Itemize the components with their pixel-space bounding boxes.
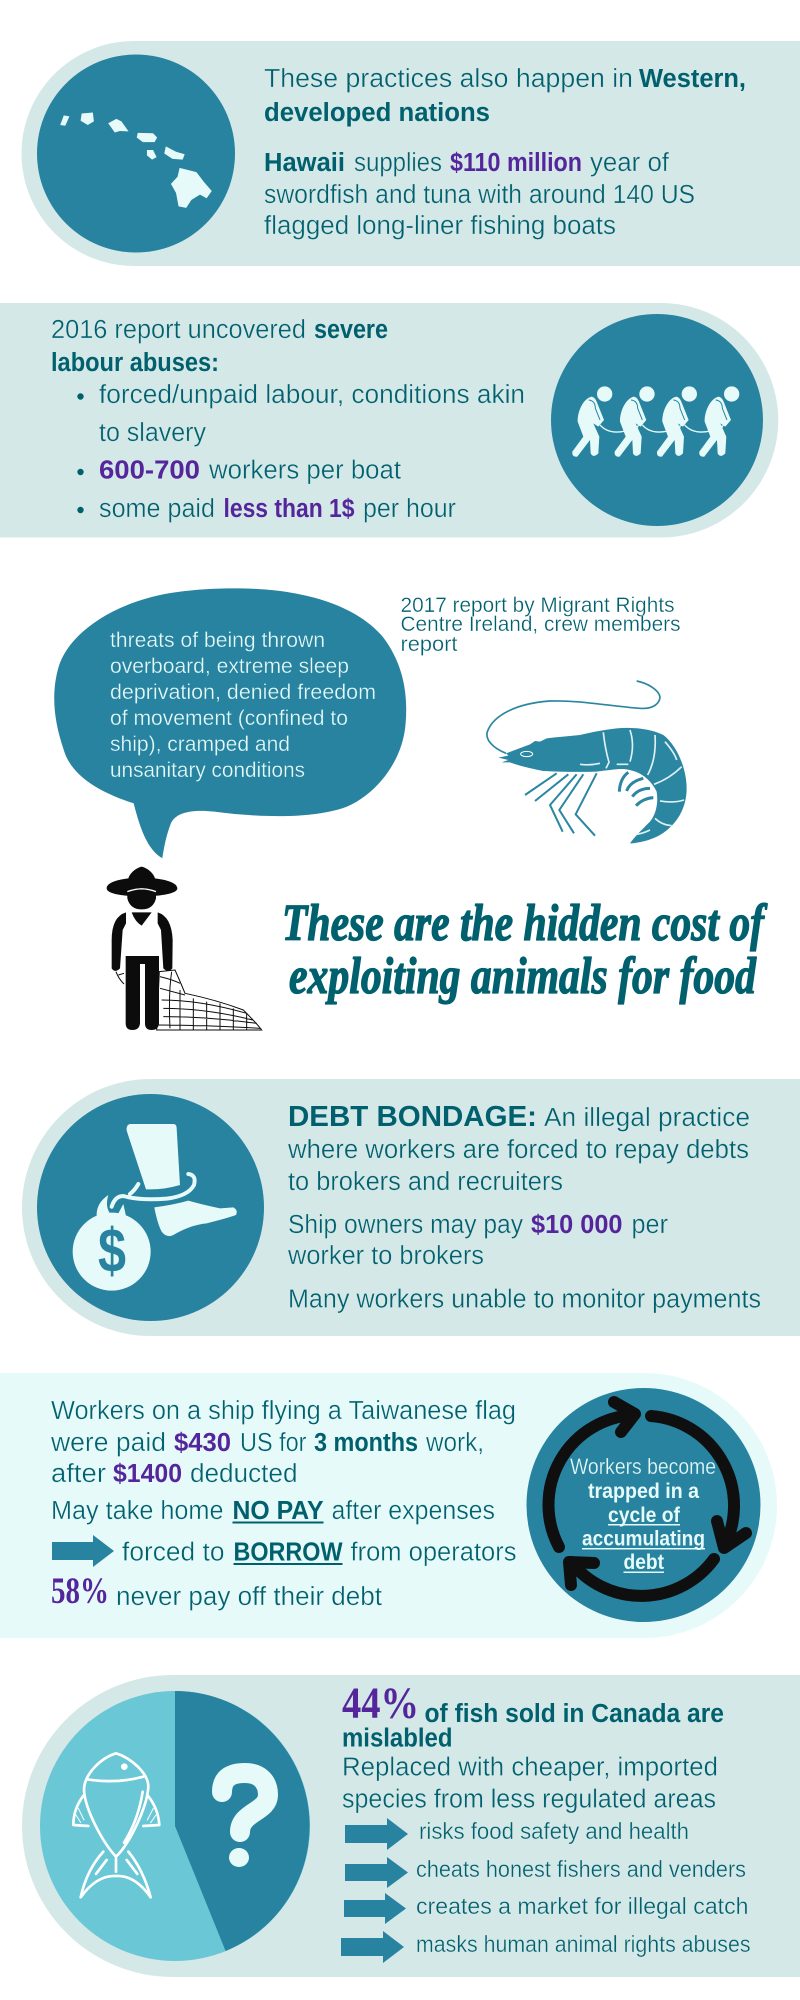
text: no pay: [51, 1497, 495, 1525]
text: Hawaii supply: $110 million: [450, 149, 582, 177]
text: 2017 report: [400, 594, 680, 656]
text: trapped in a cycle: Workers become: [570, 1454, 716, 1479]
text: debt bondage definition: [287, 1101, 750, 1196]
text: wages: [50, 1397, 516, 1488]
text: western nations heading: [264, 65, 746, 127]
text: crew threats: overboard, extreme sleep: [110, 655, 349, 678]
text: labour abuses heading: labour abuses:: [51, 349, 219, 377]
text: labour abuses heading: [51, 316, 388, 377]
text: wages: work,: [425, 1429, 484, 1457]
text: wages: after: [51, 1460, 107, 1488]
arrow: forced to borrow: [52, 1535, 114, 1567]
text: no pay: after expenses: [332, 1497, 495, 1525]
text: forced to borrow: from operators: [350, 1538, 516, 1566]
text: trapped in a cycle: trapped in a: [588, 1480, 699, 1503]
arrow: cheats: [345, 1857, 408, 1888]
text: western nations heading: These practices also happen in: [264, 65, 633, 93]
text: no pay: NO PAY: [232, 1497, 324, 1525]
title: hidden cost: [282, 895, 768, 1005]
text: trapped in a cycle: cycle of: [608, 1504, 681, 1527]
icon: shrimp: [487, 681, 687, 843]
text: forced to borrow: BORROW: [234, 1538, 343, 1566]
icon: fishing net: [116, 970, 262, 1030]
text: creates: creates a market for illegal catch: [416, 1893, 748, 1919]
text: western nations heading: Western,: [639, 65, 746, 93]
text: crew threats: deprivation, denied freedom: [110, 681, 376, 704]
text: ship owners pay: $10 000: [531, 1211, 622, 1239]
text: 2017 report: 2017 report by Migrant Rights: [400, 594, 674, 617]
panel: mislabelled fish: [22, 1675, 800, 1977]
text: ship owners pay: worker to brokers: [287, 1242, 484, 1270]
text: 58 percent: never pay off their debt: [116, 1583, 382, 1611]
panel: debt bondage: [22, 1079, 800, 1336]
text: replaced with cheaper species: [342, 1754, 718, 1814]
text: crew threats: threats of being thrown: [110, 629, 325, 652]
list: labour abuses: less than 1$: [224, 495, 354, 523]
text: wages: were paid: [50, 1429, 166, 1457]
text: crew threats: [110, 629, 376, 782]
list: labour abuses: some paid: [99, 495, 215, 523]
list: labour abuses: 600-700: [99, 456, 200, 484]
panel: Taiwanese flag wages: [0, 1373, 777, 1638]
text: wages: Workers on a ship flying a Taiwanese flag: [51, 1397, 516, 1425]
text: 44 percent mislabelled: 44%: [342, 1678, 419, 1728]
text: western nations heading: developed nations: [264, 99, 490, 127]
text: Hawaii supply: year of: [590, 149, 670, 177]
text: Hawaii supply: [264, 149, 695, 240]
list: labour abuses: [77, 381, 525, 523]
text: risks: risks food safety and health: [419, 1818, 689, 1844]
icon: shackled foot with money bag: [37, 1094, 264, 1321]
icon: debt cycle circle: [526, 1388, 760, 1622]
text: Hawaii supply: swordfish and tuna with around 140 US: [264, 181, 695, 209]
text: crew threats: ship), cramped and: [110, 733, 290, 756]
text: 44 percent mislabelled: [342, 1678, 724, 1752]
text: crew threats: unsanitary conditions: [110, 759, 305, 782]
panel: labour abuses: [0, 303, 778, 538]
text: trapped in a cycle: [570, 1454, 716, 1574]
text: debt bondage definition: DEBT BONDAGE:: [288, 1101, 537, 1133]
text: trapped in a cycle: accumulating: [582, 1528, 705, 1550]
text: masks: masks human animal rights abuses: [416, 1931, 750, 1957]
text: wages: $1400: [113, 1460, 182, 1488]
list: consequences: [341, 1818, 750, 1963]
icon: Hawaii map: [37, 54, 235, 252]
text: replaced with cheaper species: species from less regulated areas: [342, 1786, 716, 1814]
text: 2017 report: report: [400, 633, 458, 656]
icon: dollar sign: $: [98, 1217, 126, 1286]
text: unable to monitor: Many workers unable to monitor payments: [288, 1286, 761, 1314]
text: debt bondage definition: to brokers and recruiters: [288, 1168, 563, 1196]
icon: question mark: [222, 1773, 268, 1867]
text: wages: deducted: [190, 1460, 298, 1488]
icon: fish: [73, 1753, 159, 1897]
text: 58 percent: 58%: [51, 1571, 109, 1612]
list: labour abuses: per hour: [363, 495, 456, 523]
text: 58 percent: [51, 1571, 382, 1612]
text: no pay: May take home: [51, 1497, 224, 1525]
icon: fisherman with net: [107, 867, 262, 1030]
text: wages: 3 months: [314, 1429, 418, 1457]
text: replaced with cheaper species: Replaced with cheaper, imported: [342, 1754, 718, 1782]
text: Hawaii supply: flagged long-liner fishing boats: [264, 212, 616, 240]
text: labour abuses heading: severe: [314, 316, 388, 344]
text: 44 percent mislabelled: of fish sold in Canada are: [424, 1700, 724, 1728]
text: debt bondage definition: An illegal practice: [544, 1104, 750, 1132]
text: Hawaii supply: Hawaii: [264, 149, 345, 177]
text: cheats: cheats honest fishers and venders: [416, 1856, 746, 1882]
text: ship owners pay: [287, 1211, 668, 1270]
arrow: creates: [344, 1893, 406, 1924]
text: Hawaii supply: supplies: [354, 149, 442, 177]
panel: western nations: [21, 41, 800, 266]
arrow: masks: [341, 1931, 404, 1963]
text: ship owners pay: Ship owners may pay: [288, 1211, 523, 1239]
icon: chained workers: [551, 314, 763, 526]
list: labour abuses: workers per boat: [208, 456, 401, 484]
arrow: risks: [345, 1818, 408, 1850]
text: 2017 report: Centre Ireland, crew members: [400, 613, 680, 636]
text: wages: $430: [174, 1429, 231, 1457]
text: ship owners pay: per: [632, 1211, 668, 1239]
text: debt bondage definition: where workers are forced to repay debts: [287, 1136, 749, 1164]
list: labour abuses: forced/unpaid labour, conditions akin: [99, 381, 525, 409]
icon: cycle arrows: [549, 1402, 746, 1596]
list: labour abuses: to slavery: [99, 419, 206, 447]
text: forced to borrow: [122, 1538, 516, 1566]
text: crew threats: of movement (confined to: [110, 707, 348, 730]
text: 44 percent mislabelled: mislabled: [342, 1724, 452, 1752]
text: labour abuses heading: 2016 report uncovered: [51, 316, 306, 344]
text: trapped in a cycle: debt: [624, 1551, 664, 1574]
text: forced to borrow: forced to: [122, 1538, 224, 1566]
text: wages: US for: [240, 1429, 307, 1457]
speech bubble: [54, 588, 406, 858]
chart: 44 percent pie: [40, 1691, 310, 1961]
